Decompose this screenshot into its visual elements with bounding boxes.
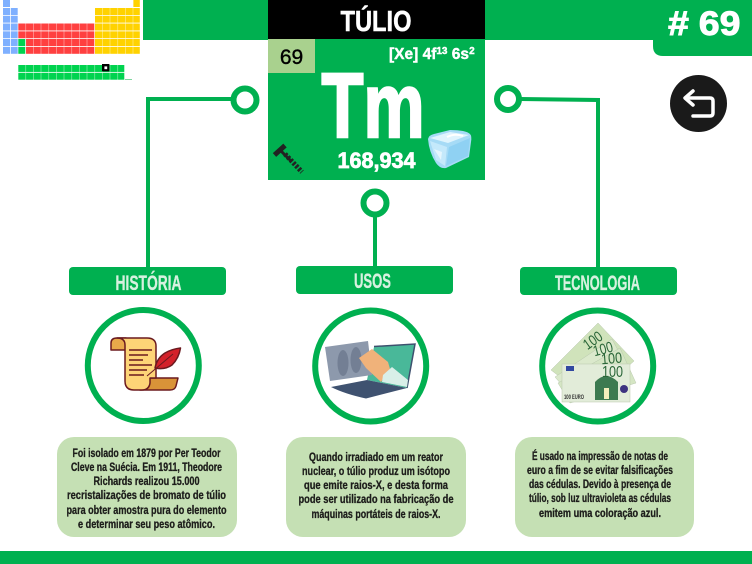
text block: tecnologia: túlio, sob luz ultravioleta as cédulas	[529, 493, 671, 505]
icon: euro banknotes	[551, 323, 636, 403]
text block: história: Foi isolado em 1879 por Per Teodor	[72, 448, 221, 460]
text block: história: e determinar seu peso atômico.	[78, 519, 215, 531]
icon: back button	[670, 75, 727, 132]
text block: usos: pode ser utilizado na fabricação de	[298, 494, 454, 506]
text block: tecnologia: É usado na impressão de notas de	[532, 450, 668, 463]
icon: euro banknotes: 100	[602, 364, 623, 381]
icon: euro banknotes: 100	[600, 350, 623, 368]
bottom green band	[0, 551, 752, 564]
heading: Usos	[296, 266, 453, 294]
icon: scroll and quill	[111, 338, 180, 390]
connector: card to Tecnologia	[497, 88, 598, 267]
text block: usos: Quando irradiado em um reator	[309, 452, 443, 464]
text block: tecnologia: euro a fim de se evitar falsificações	[527, 465, 673, 477]
heading: Tecnologia: TECNOLOGIA	[555, 272, 640, 295]
icon: euro banknotes: 100	[591, 339, 615, 360]
heading: Tecnologia	[520, 267, 677, 295]
text block: história: recristalizações de bromato de túlio	[67, 490, 226, 502]
text block: história: para obter amostra pura do elemento	[66, 505, 226, 517]
heading: História: HISTÓRIA	[116, 271, 182, 295]
text block: usos	[286, 437, 466, 537]
heading: Usos: USOS	[354, 270, 391, 293]
electron configuration: 13	[436, 46, 448, 57]
atomic mass: 168,934	[338, 148, 416, 173]
badge: element number 69	[653, 0, 752, 56]
atomic number box	[268, 39, 315, 73]
element card	[268, 39, 485, 180]
atomic number box: 69	[280, 46, 303, 69]
text block: usos: nuclear, o túlio produz um isótopo	[302, 466, 450, 478]
text block: tecnologia	[515, 437, 694, 537]
icon: laptop with x-ray	[325, 341, 415, 398]
text block: história: Cleve na Suécia. Em 1911, Theodore	[71, 462, 222, 474]
electron configuration: 2	[469, 46, 475, 57]
icon: euro banknotes: 100 EURO	[564, 395, 584, 401]
icon: ice cube	[428, 130, 471, 168]
text block: história: Richards realizou 15.000	[94, 476, 200, 488]
element symbol: Tm	[322, 55, 424, 157]
icon: euro banknotes: 100	[580, 328, 606, 354]
heading: História	[69, 267, 226, 295]
badge: element number 69: # 69	[668, 5, 740, 43]
text block: tecnologia: emitem uma coloração azul.	[539, 508, 661, 520]
text block: usos: que emite raios-X, e desta forma	[304, 480, 448, 492]
panel: história illustration	[88, 310, 199, 421]
top green header band	[143, 0, 752, 40]
electron configuration: [Xe] 4f	[389, 46, 437, 63]
title: TÚLIO	[268, 0, 485, 40]
panel: usos illustration	[315, 310, 426, 422]
title: TÚLIO: TÚLIO	[340, 4, 412, 38]
text block: história	[57, 437, 237, 537]
electron configuration: 6s	[448, 46, 469, 63]
panel: tecnologia illustration	[542, 310, 653, 422]
mini periodic table locator	[3, 0, 140, 80]
icon: screw	[274, 146, 302, 172]
connector: card to História	[148, 88, 256, 267]
text block: usos: máquinas portáteis de raios-X.	[312, 509, 440, 521]
connector: card to Usos	[364, 192, 386, 267]
text block: tecnologia: das cédulas. Devido à presença de	[529, 479, 671, 491]
